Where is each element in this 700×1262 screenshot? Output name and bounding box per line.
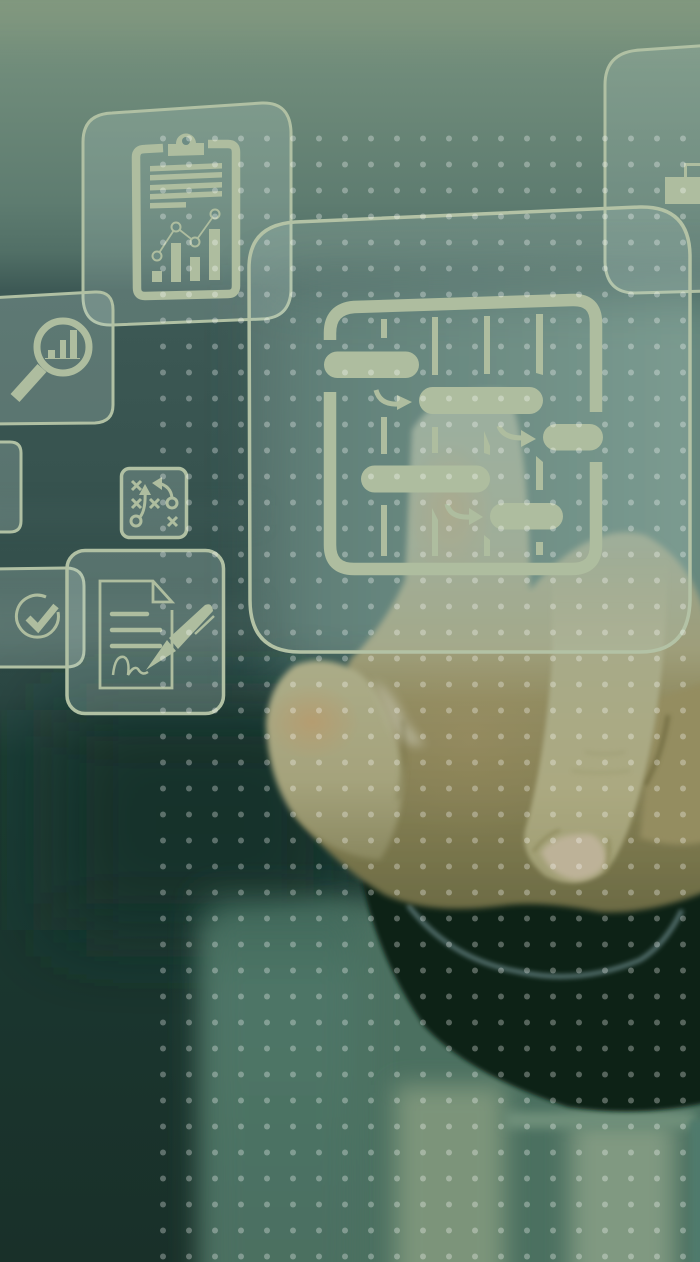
panel: strategy playbook <box>122 468 186 538</box>
hand: finger wrinkles <box>572 752 630 773</box>
panel: signed document <box>67 550 224 714</box>
panel: magnifier <box>0 292 113 424</box>
sleeve cuff <box>362 880 700 1111</box>
gantt: task bars <box>324 352 603 530</box>
icon: top right workflow fragment <box>665 163 700 204</box>
hand: palm <box>295 390 700 912</box>
panel: approval check <box>0 568 84 667</box>
dot grid overlay <box>150 126 696 1262</box>
hand: thumb <box>266 661 403 860</box>
hand: fingernail <box>541 834 606 880</box>
hand: pointing finger <box>524 560 668 883</box>
hand: nail rim <box>533 830 609 872</box>
panel: clipboard <box>83 103 291 325</box>
icon: signed document and pen <box>100 581 214 688</box>
hand: right finger <box>640 680 700 845</box>
hand: pale knuckle crease <box>372 680 425 746</box>
gantt: column ticks <box>381 314 543 556</box>
gantt: flow arrows <box>376 390 536 525</box>
icon: strategy play <box>131 477 177 526</box>
hand: warm finger shade <box>405 440 495 580</box>
panel: main gantt chart <box>249 207 690 652</box>
icon: check mark circle <box>16 595 58 637</box>
icon: gantt chart workflow <box>324 300 603 569</box>
gantt: outer frame <box>330 300 596 569</box>
hand: warm palm shade <box>360 640 580 840</box>
hand: thumb tip warmth <box>264 684 360 760</box>
panel: top right <box>605 45 700 293</box>
panel: small left <box>0 442 21 532</box>
icon: magnifier with bars <box>15 321 89 398</box>
icon: clipboard report <box>136 133 236 296</box>
hand <box>264 390 700 912</box>
